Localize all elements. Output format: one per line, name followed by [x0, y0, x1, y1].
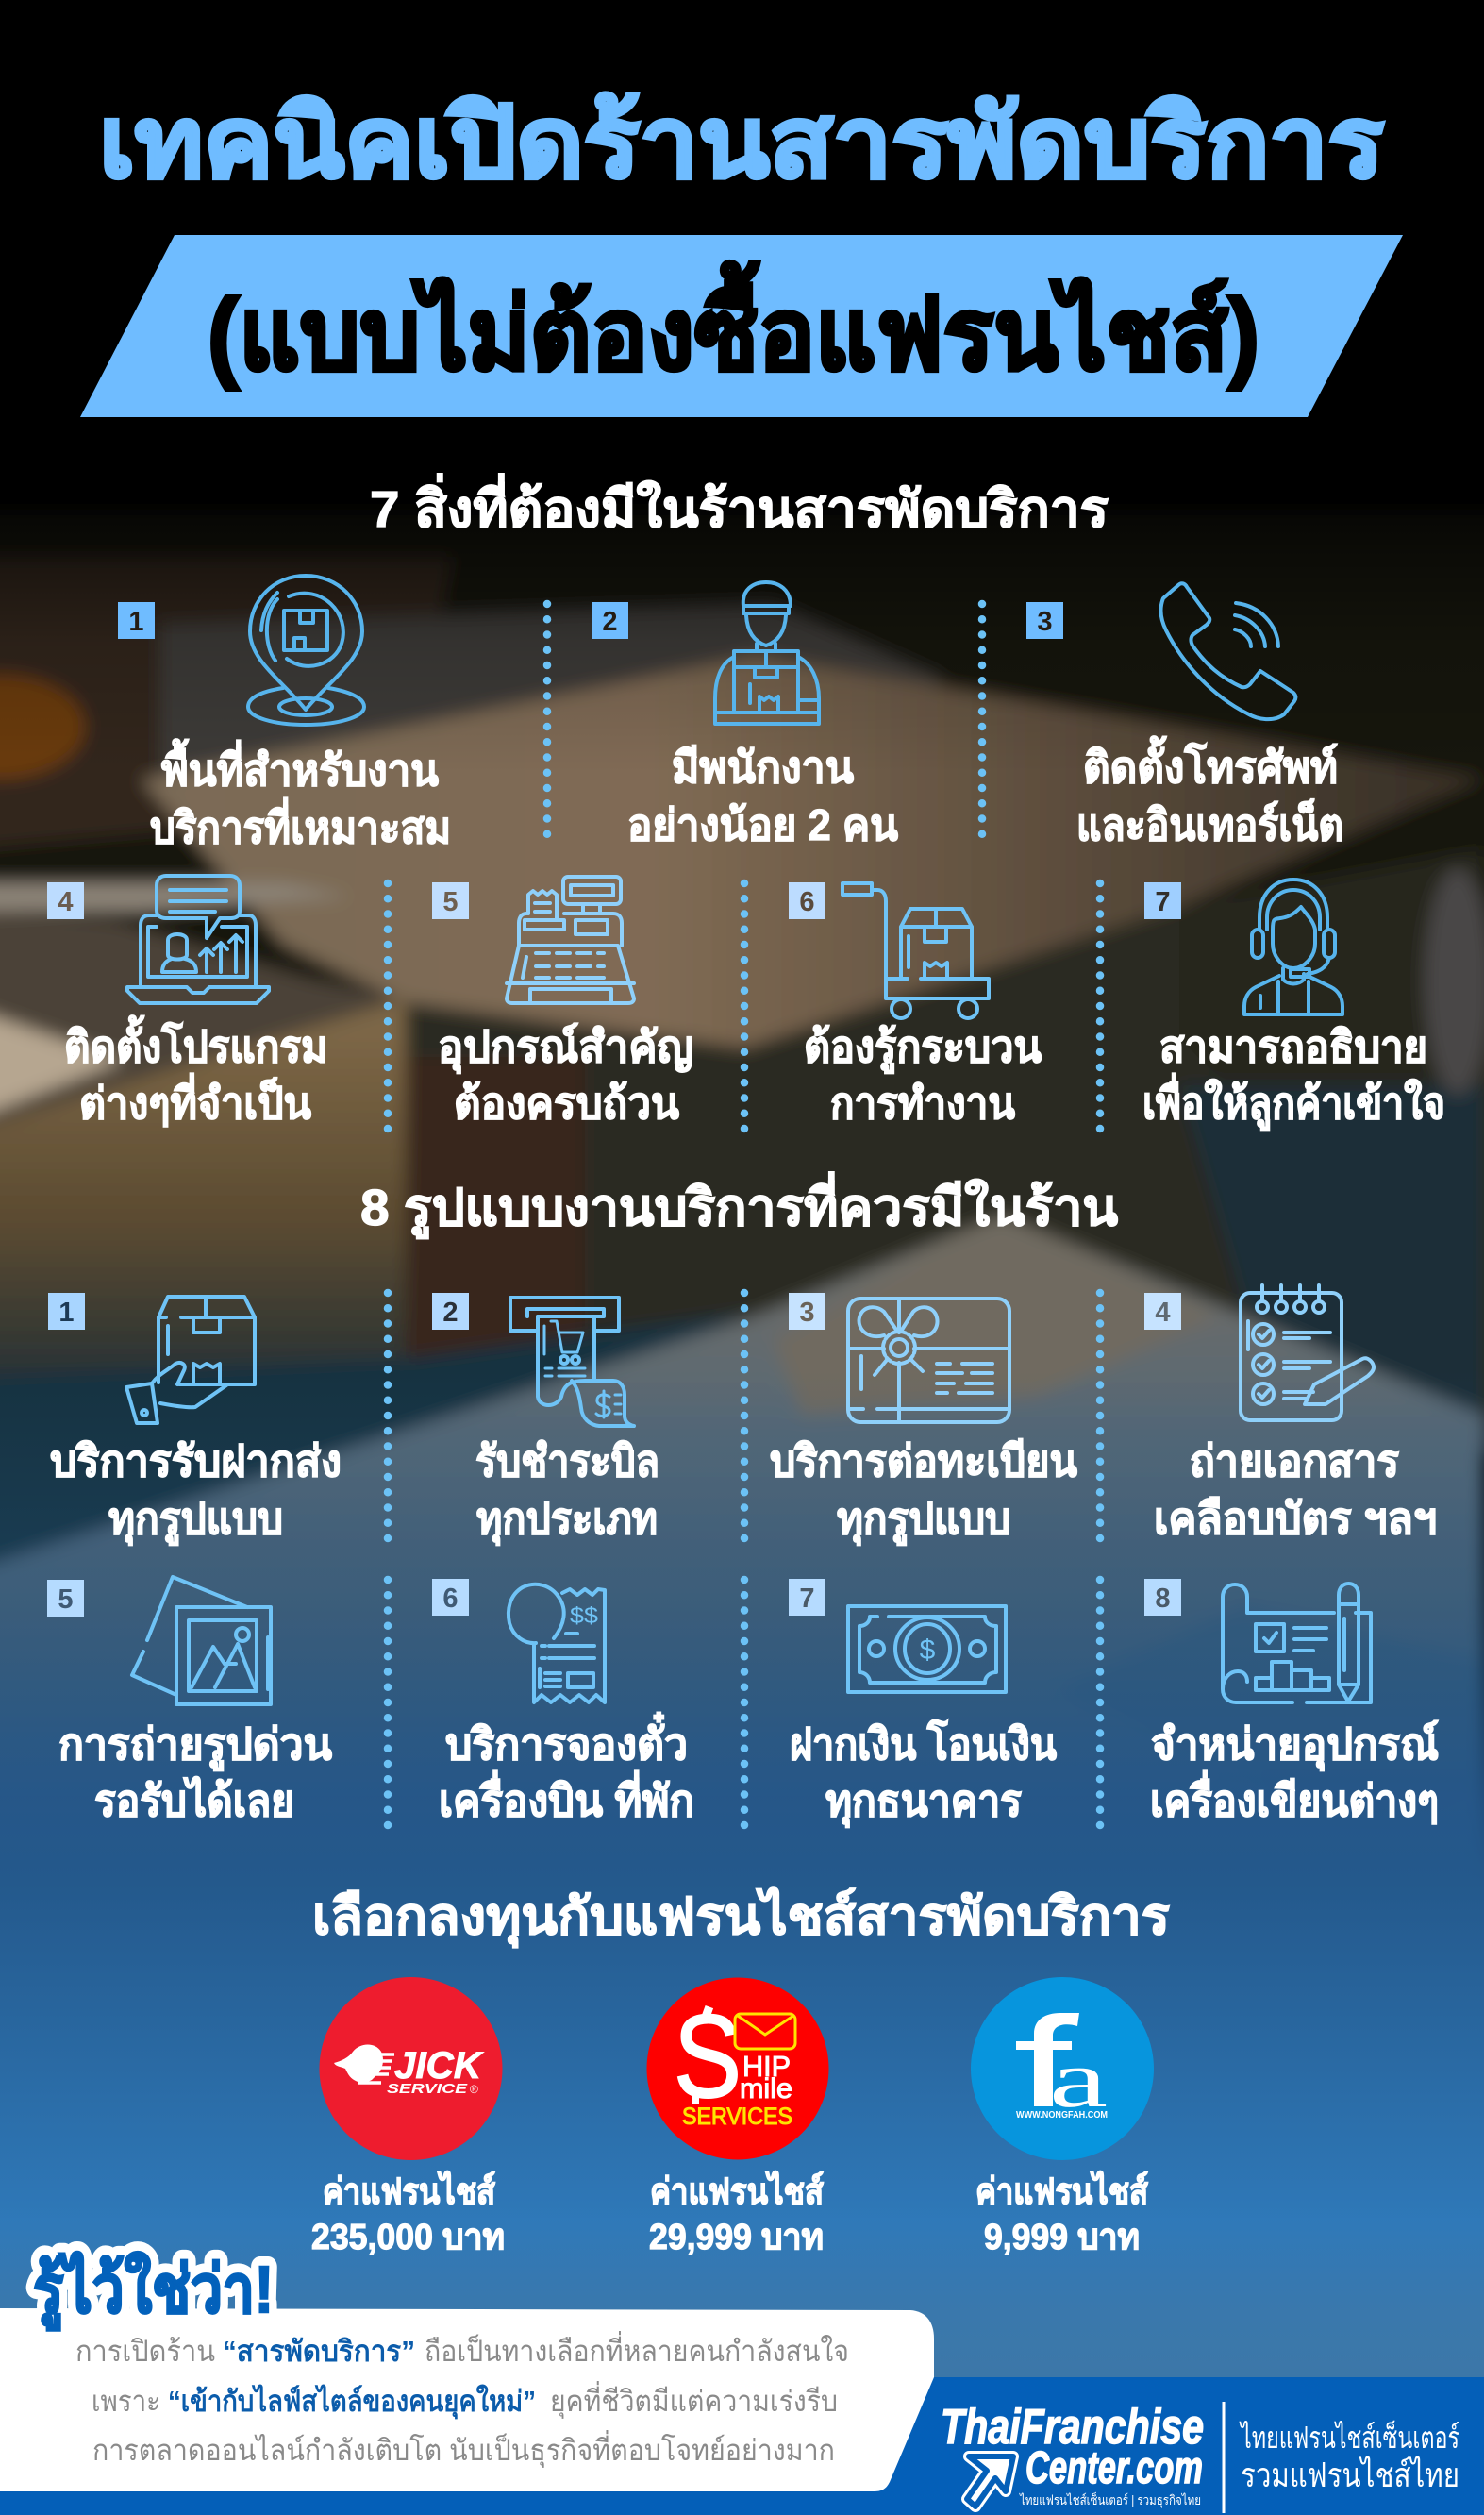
label: ทุกประเภท	[476, 1494, 658, 1546]
label	[770, 1436, 1078, 1546]
item 3: phone and internet	[1026, 583, 1343, 849]
footer logo: ThaiFranchise	[941, 2400, 1204, 2455]
logo: Quick Service: SERVICE	[387, 2081, 468, 2097]
icon: laptop with chat	[127, 876, 269, 1003]
icon: balloon and ticket	[509, 1584, 605, 1702]
badge 4: 4	[1155, 1298, 1171, 1328]
badge 5: 5	[58, 1584, 74, 1615]
logo: fa: a	[1049, 2034, 1108, 2124]
service 4: copy and laminate	[1144, 1285, 1437, 1543]
logo: fa	[971, 1977, 1154, 2160]
badge 2	[592, 602, 628, 639]
badge 4	[1144, 1293, 1181, 1330]
badge 7: 7	[799, 1584, 815, 1614]
icon: banknote: $	[920, 1635, 936, 1666]
badge 5	[432, 882, 469, 919]
price: 235,000 บาท	[311, 2218, 505, 2257]
item 6: process	[789, 882, 1042, 1128]
label: ติดตั้งโทรศัพท์	[1083, 735, 1338, 792]
label	[439, 1712, 694, 1825]
label: และอินเทอร์เน็ต	[1076, 798, 1343, 849]
badge 4	[47, 882, 84, 919]
icon: telephone	[1161, 583, 1295, 719]
icon: hand holding box	[126, 1297, 255, 1423]
icon: checklist notepad	[1241, 1285, 1374, 1420]
icon: arrow	[967, 2456, 1013, 2507]
badge 1	[118, 602, 155, 639]
icon: gift card	[848, 1299, 1009, 1422]
label: ต่างๆที่จำเป็น	[79, 1073, 312, 1128]
label: การถ่ายรูปด่วน	[58, 1719, 333, 1771]
logo: Ship Smile Services	[647, 1978, 828, 2159]
label: เครื่องบิน ที่พัก	[439, 1770, 694, 1825]
badge 3	[789, 1293, 825, 1330]
footer logo	[941, 2400, 1204, 2508]
icon: cash register	[507, 877, 634, 1003]
label: บริการที่เหมาะสม	[150, 797, 451, 852]
badge 2	[432, 1293, 469, 1330]
badge 3: 3	[1037, 607, 1053, 637]
logo: Quick Service: ®	[470, 2083, 478, 2096]
badge 6	[789, 882, 825, 919]
label: ทุกรูปแบบ	[837, 1494, 1010, 1546]
price: ค่าแฟรนไชส์	[323, 2171, 496, 2212]
note text: “เข้ากับไลฟ์สไตล์ของคนยุคใหม่”	[168, 2384, 536, 2420]
logo: fa: WWW.NONGFAH.COM	[1016, 2110, 1108, 2121]
icon: photo frames	[132, 1577, 271, 1704]
badge 8	[1144, 1579, 1181, 1616]
label: สามารถอธิบาย	[1159, 1022, 1427, 1071]
label	[438, 1022, 693, 1128]
label: ฝากเงิน โอนเงิน	[790, 1719, 1057, 1769]
item 5: equipment	[432, 877, 693, 1128]
note text: “สารพัดบริการ”	[223, 2335, 415, 2368]
badge 1: 1	[128, 607, 144, 637]
franchise: Ship Smile	[647, 1978, 828, 2257]
badge 7	[789, 1579, 825, 1616]
label	[64, 1014, 327, 1128]
footer logo: Center.com	[1025, 2443, 1203, 2493]
note text: การเปิดร้าน	[75, 2335, 215, 2368]
label: จำหน่ายอุปกรณ์	[1151, 1719, 1439, 1771]
heading: did you know: รู้ไว้ใช่ว่า!	[33, 2251, 274, 2331]
icon: parcel trolley	[842, 883, 989, 1018]
badge 1: 1	[58, 1298, 75, 1328]
heading: did you know: รู้ไว้ใช่ว่า!	[33, 2251, 274, 2331]
item 1: space	[118, 576, 451, 852]
service 5: photos	[47, 1577, 333, 1825]
label: รอรับได้เลย	[94, 1776, 294, 1825]
label	[790, 1719, 1057, 1828]
label	[1154, 1436, 1437, 1543]
label: การทำงาน	[830, 1079, 1016, 1128]
label: เคลือบบัตร ฯลฯ	[1154, 1494, 1437, 1543]
icon: delivery man	[715, 582, 819, 724]
badge 4: 4	[58, 887, 74, 917]
label: ทุกธนาคาร	[825, 1776, 1022, 1828]
heading: 8 services: 8 รูปแบบงานบริการที่ควรมีในร้าน	[360, 1171, 1118, 1239]
icon: blueprint and pencil	[1223, 1584, 1371, 1702]
label: เครื่องเขียนต่างๆ	[1150, 1770, 1439, 1825]
label	[1142, 1022, 1445, 1131]
label	[1150, 1719, 1439, 1825]
did-you-know panel	[0, 2251, 934, 2491]
logo: Ship Smile Services: SERVICES	[682, 2104, 792, 2130]
price: 9,999 บาท	[984, 2218, 1140, 2257]
badge 6: 6	[442, 1584, 459, 1614]
label	[1076, 735, 1343, 849]
service 7: bank	[789, 1579, 1057, 1828]
item 4: software	[47, 876, 327, 1128]
heading: 7 things: 7 สิ่งที่ต้องมีในร้านสารพัดบริการ	[370, 473, 1109, 538]
icon: banknote	[848, 1606, 1006, 1692]
label	[50, 1436, 342, 1546]
label: พื้นที่สำหรับงาน	[161, 738, 440, 795]
badge 2: 2	[442, 1298, 459, 1328]
heading: franchises: เลือกลงทุนกับแฟรนไชส์สารพัดบริการ	[312, 1886, 1170, 1949]
subtitle banner	[80, 235, 1403, 417]
item 7: explain	[1142, 880, 1445, 1131]
label: บริการจองตั๋ว	[445, 1712, 688, 1769]
logo: Quick Service	[319, 1977, 502, 2160]
badge 6	[432, 1579, 469, 1616]
badge 5	[47, 1580, 84, 1617]
label: มีพนักงาน	[672, 743, 855, 792]
badge 1	[48, 1293, 85, 1330]
label: อุปกรณ์สำคัญ	[438, 1022, 693, 1074]
logo: Ship Smile Services: HIP	[742, 2050, 791, 2083]
badge 3	[1026, 602, 1063, 639]
label: บริการต่อทะเบียน	[770, 1436, 1078, 1485]
label	[150, 738, 451, 852]
label: ต้องครบถ้วน	[454, 1079, 680, 1128]
franchise: Nong Fah	[971, 1977, 1154, 2257]
icon: receipt with cart	[510, 1298, 634, 1426]
price	[649, 2171, 825, 2257]
franchise: Quick Service	[311, 1977, 505, 2257]
service 2: bills	[432, 1293, 659, 1546]
subtitle banner: (แบบไม่ต้องซื้อแฟรนไชส์)	[208, 260, 1259, 391]
label: เพื่อให้ลูกค้าเข้าใจ	[1142, 1073, 1445, 1131]
price	[311, 2171, 505, 2257]
badge 7	[1144, 882, 1181, 919]
price	[975, 2171, 1149, 2257]
price: 29,999 บาท	[649, 2218, 824, 2257]
price: ค่าแฟรนไชส์	[975, 2171, 1149, 2212]
label: ต้องรู้กระบวน	[804, 1022, 1042, 1074]
footer tagline	[1239, 2420, 1459, 2494]
label	[475, 1436, 659, 1546]
badge 8: 8	[1155, 1584, 1171, 1614]
service 3: renewal	[770, 1293, 1078, 1546]
price: ค่าแฟรนไชส์	[650, 2171, 825, 2212]
badge 5: 5	[442, 887, 459, 917]
note text	[75, 2331, 849, 2469]
badge 6: 6	[799, 887, 815, 917]
note text: การตลาดออนไลน์กำลังเติบโต นับเป็นธุรกิจที่ตอบโจทย์อย่างมาก	[92, 2430, 835, 2469]
label	[804, 1022, 1042, 1128]
label: ทุกรูปแบบ	[108, 1494, 283, 1546]
badge 2: 2	[602, 607, 618, 637]
footer logo: ไทยแฟรนไชส์เซ็นเตอร์ | รวมธุรกิจไทย	[1019, 2491, 1201, 2508]
icon: location pin with box	[248, 576, 364, 725]
icon: call-centre agent	[1244, 880, 1342, 1014]
label: ติดตั้งโปรแกรม	[64, 1014, 327, 1071]
icon: balloon and ticket: $$	[570, 1603, 598, 1629]
service 1: parcel	[48, 1293, 342, 1546]
label: รับชำระบิล	[475, 1436, 659, 1485]
service 6: tickets	[432, 1579, 694, 1825]
item 2: staff	[592, 582, 899, 849]
label	[627, 743, 899, 849]
label: อย่างน้อย 2 คน	[627, 800, 899, 849]
note text: ยุคที่ชีวิตมีแต่ความเร่งรีบ	[550, 2381, 838, 2420]
label: บริการรับฝากส่ง	[50, 1436, 342, 1485]
badge 7: 7	[1155, 887, 1171, 917]
note text: ถือเป็นทางเลือกที่หลายคนกำลังสนใจ	[425, 2331, 849, 2368]
logo: Quick Service: JICK	[394, 2045, 484, 2087]
service 8: stationery	[1144, 1579, 1439, 1825]
note text: เพราะ	[92, 2385, 160, 2418]
title: เทคนิคเปิดร้านสารพัดบริการ	[99, 89, 1384, 198]
badge 3: 3	[799, 1298, 815, 1328]
label: ถ่ายเอกสาร	[1190, 1436, 1399, 1485]
label	[58, 1719, 333, 1825]
logo: Ship Smile Services: mile	[740, 2073, 792, 2104]
logo: Ship Smile Services: S	[674, 1992, 742, 2122]
